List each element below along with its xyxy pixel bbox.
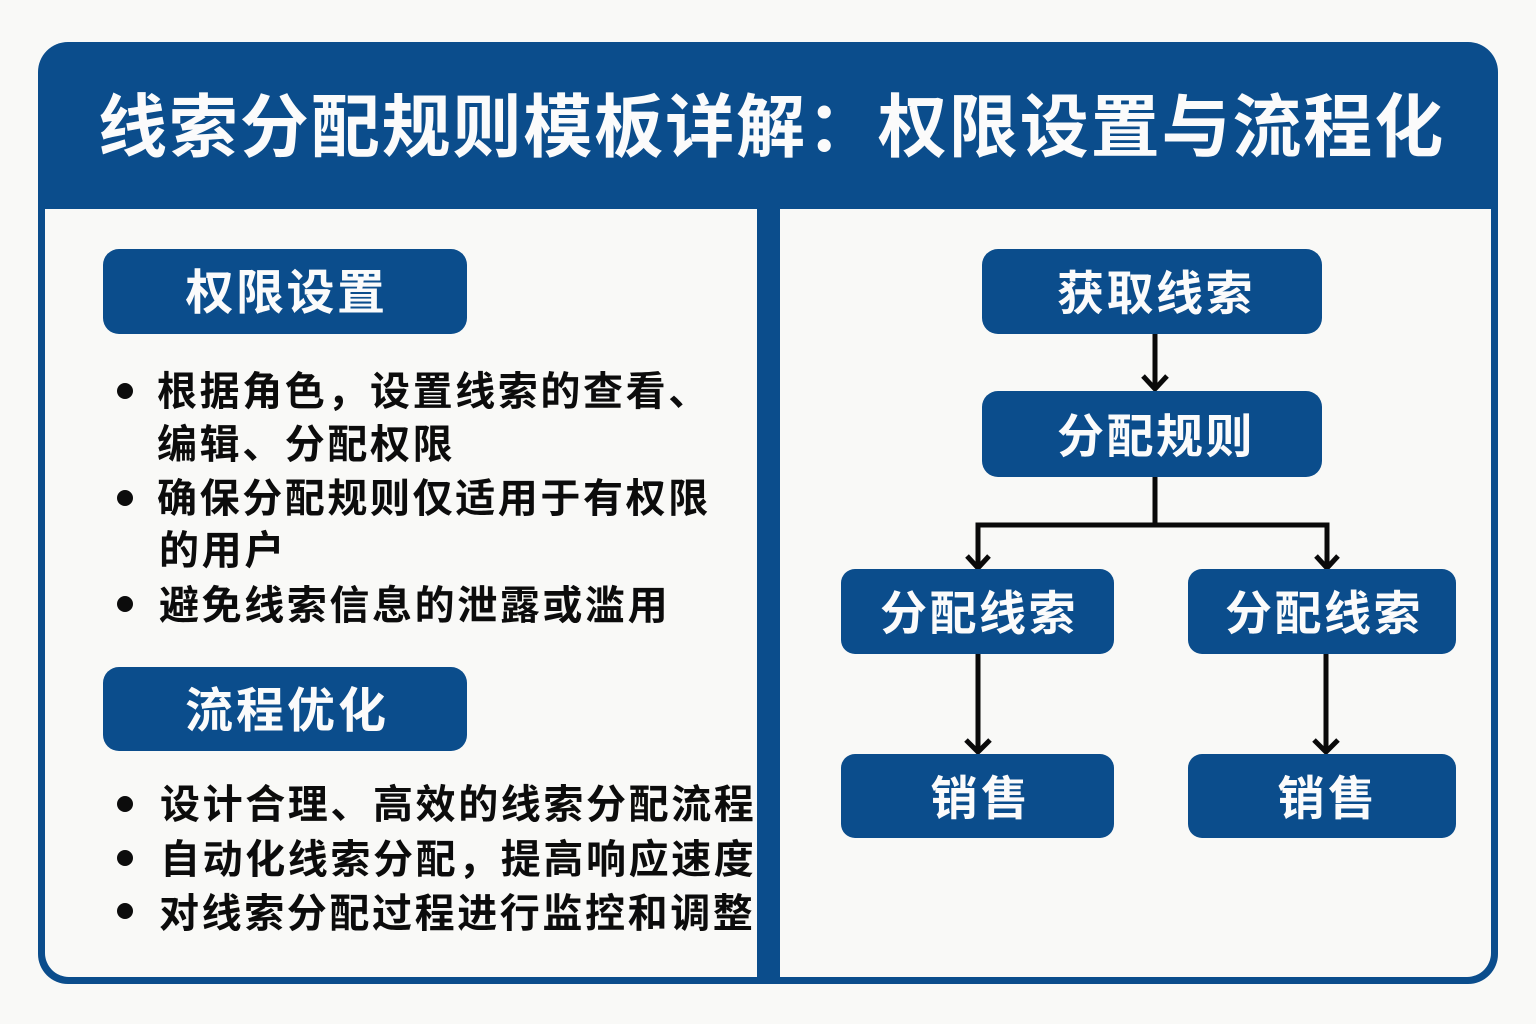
arrow: rules branching to both assign boxes: [967, 477, 1338, 568]
heading: permission settings: [103, 249, 467, 334]
title: 线索分配规则模板详解：权限设置与流程化: [98, 89, 1445, 166]
bullet 3 text: 避免线索信息的泄露或滥用: [159, 584, 670, 628]
bullet 1: [117, 383, 133, 399]
flow box: sales right: 销售: [1278, 772, 1378, 825]
bullet 5 text: 自动化线索分配，提高响应速度: [160, 838, 756, 882]
flow box: sales right: [1188, 754, 1456, 838]
flow box: assign leads right: 分配线索: [1225, 587, 1423, 640]
flow box: get leads: [982, 249, 1322, 334]
bullet 2 text continued: 的用户: [159, 529, 287, 573]
heading: process optimization: 流程优化: [185, 685, 389, 738]
bullet 5: [117, 850, 133, 866]
bullet list: process: [117, 783, 756, 936]
bullet 1 text: 根据角色，设置线索的查看、: [157, 370, 711, 414]
heading: permission settings: 权限设置: [185, 267, 388, 320]
bullet 4 text: 设计合理、高效的线索分配流程: [160, 783, 756, 827]
flow box: assign leads right: [1188, 569, 1456, 654]
heading: process optimization: [103, 667, 467, 751]
flow box: assign leads left: 分配线索: [880, 587, 1078, 640]
bullet 3: [117, 596, 133, 612]
flowchart arrows: [964, 334, 1340, 754]
flow box: assignment rules: 分配规则: [1057, 410, 1255, 463]
bullet 6 text: 对线索分配过程进行监控和调整: [159, 892, 755, 936]
bullet list: permissions: [117, 370, 711, 628]
bullet 1 text continued: 编辑、分配权限: [157, 423, 455, 467]
arrow: left assign to sales: [966, 654, 990, 752]
flow box: get leads: 获取线索: [1057, 267, 1255, 320]
bullet 4: [117, 796, 133, 812]
flow box: assign leads left: [841, 569, 1114, 654]
flow box: sales left: [841, 754, 1114, 838]
bullet 6: [117, 903, 133, 919]
panel: left permissions and process: [45, 209, 757, 977]
arrow: get leads to rules: [1143, 334, 1167, 389]
flow box: assignment rules: [982, 391, 1322, 477]
bullet 2: [117, 490, 133, 506]
arrow: right assign to sales: [1314, 654, 1338, 752]
bullet 2 text: 确保分配规则仅适用于有权限: [157, 477, 711, 521]
panel: right flowchart: [780, 209, 1491, 977]
flow box: sales left: 销售: [930, 772, 1032, 825]
